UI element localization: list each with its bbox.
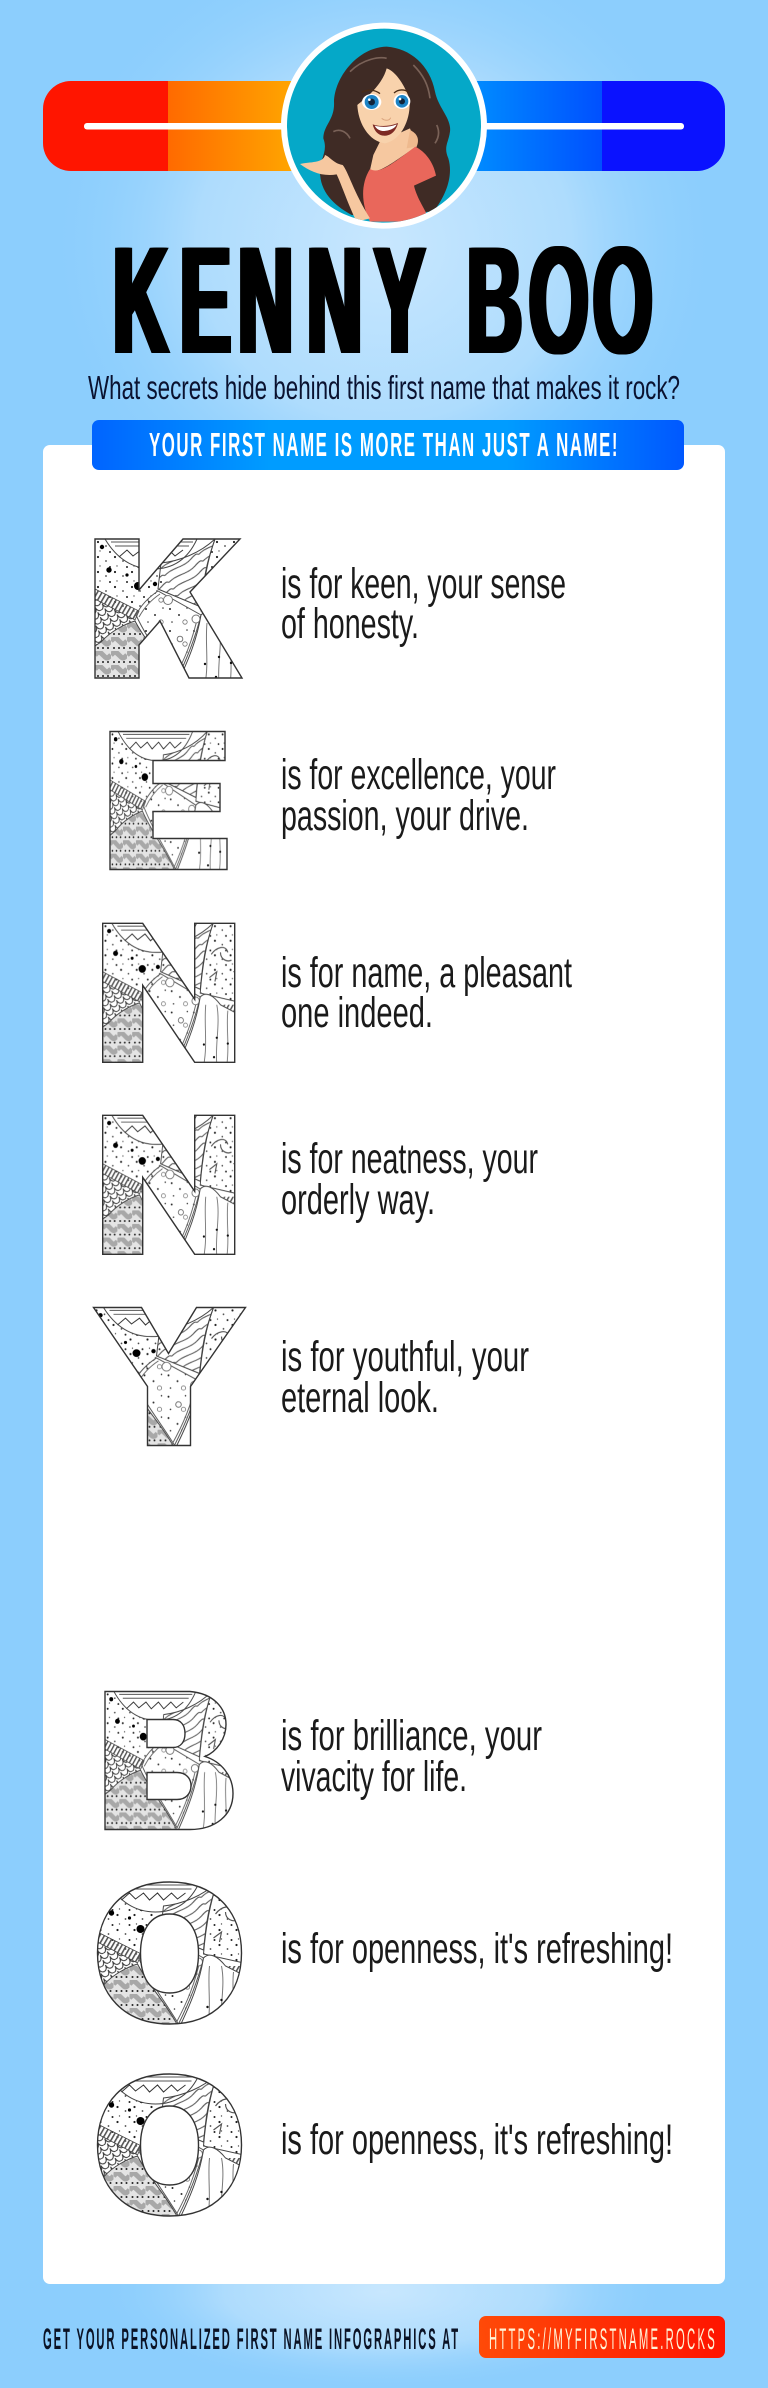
row: B	[105, 1692, 542, 1830]
text: N meaning: is for neatness, your	[281, 1135, 538, 1183]
row: O second	[98, 2074, 673, 2216]
icon: zentangle letter K	[95, 539, 242, 678]
text: N meaning: orderly way.	[281, 1176, 435, 1224]
title: KENNY BOO	[113, 215, 653, 386]
icon: zentangle letter O	[98, 1882, 242, 2024]
text: N meaning	[281, 949, 572, 1037]
text: E meaning	[281, 751, 556, 840]
header bar	[43, 81, 725, 171]
row: E	[110, 732, 556, 870]
row: N second	[103, 1115, 538, 1254]
row: N	[103, 923, 572, 1062]
row: O	[98, 1882, 673, 2024]
text: K meaning: is for keen, your sense	[281, 560, 566, 608]
text: E meaning: is for excellence, your	[281, 751, 556, 799]
text: E meaning: passion, your drive.	[281, 792, 529, 840]
text: N meaning: one indeed.	[281, 989, 433, 1037]
text: Y meaning: is for youthful, your	[281, 1333, 529, 1381]
icon: avatar portrait	[281, 23, 487, 229]
text: Y meaning	[281, 1333, 529, 1422]
footer link button	[479, 2316, 725, 2358]
icon: zentangle letter N	[103, 1115, 235, 1254]
text: N meaning	[281, 1135, 538, 1224]
row: Y	[94, 1308, 529, 1446]
row: K	[95, 539, 566, 678]
icon: zentangle letter O	[98, 2074, 242, 2216]
banner	[92, 420, 684, 470]
text: K meaning	[281, 560, 566, 648]
icon: zentangle letter Y	[94, 1308, 246, 1446]
icon: zentangle letter N	[103, 923, 235, 1062]
text: Y meaning: eternal look.	[281, 1374, 439, 1422]
text: B meaning	[281, 1712, 542, 1801]
icon: zentangle letter E	[110, 732, 227, 870]
text: B meaning: is for brilliance, your	[281, 1712, 542, 1760]
panel: white card	[43, 445, 725, 2284]
icon: zentangle letter B	[105, 1692, 233, 1830]
text: N meaning: is for name, a pleasant	[281, 949, 572, 997]
text: B meaning: vivacity for life.	[281, 1753, 467, 1801]
text: K meaning: of honesty.	[281, 600, 419, 648]
